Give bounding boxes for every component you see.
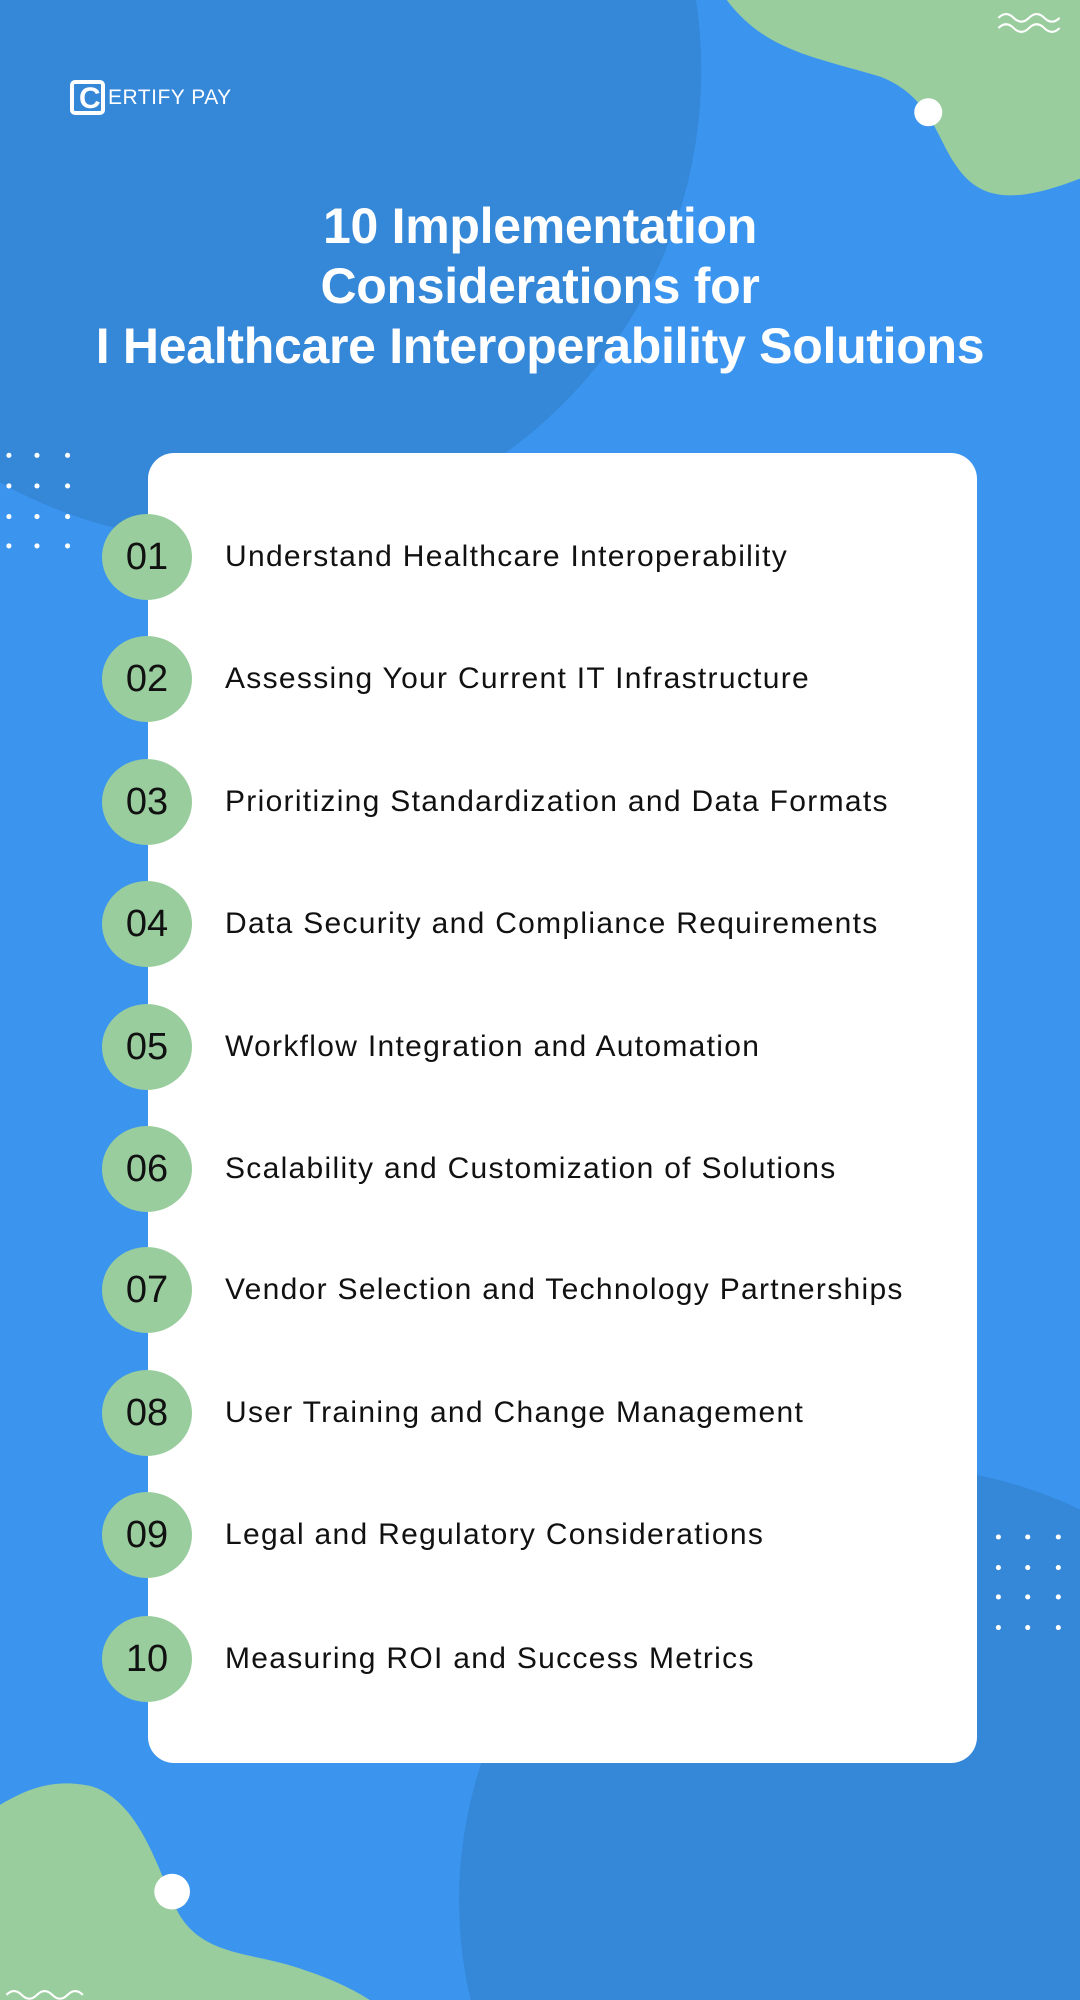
item 02: 02 xyxy=(126,658,168,700)
item 03: 03 xyxy=(126,781,168,823)
panel: list card xyxy=(148,453,977,1763)
logo: C xyxy=(79,82,101,115)
item 06: 06 xyxy=(126,1148,168,1190)
item 09 xyxy=(102,1492,764,1578)
item 08: User Training and Change Management xyxy=(225,1396,804,1429)
title: 10 Implementation xyxy=(323,198,757,254)
logo xyxy=(70,80,232,115)
item 10: Measuring ROI and Success Metrics xyxy=(225,1642,755,1675)
logo: ERTIFY PAY xyxy=(108,86,232,109)
item 05 xyxy=(102,1004,760,1090)
item 10 xyxy=(102,1616,755,1702)
item 07: 07 xyxy=(126,1269,168,1311)
item 06 xyxy=(102,1126,837,1212)
item 07 xyxy=(102,1247,904,1333)
item 02: Assessing Your Current IT Infrastructure xyxy=(225,662,810,695)
item 04: Data Security and Compliance Requirements xyxy=(225,907,879,940)
item 05: 05 xyxy=(126,1026,168,1068)
item 07: Vendor Selection and Technology Partnerships xyxy=(225,1273,904,1306)
item 01: Understand Healthcare Interoperability xyxy=(225,540,788,573)
item 08 xyxy=(102,1370,804,1456)
item 02 xyxy=(102,636,810,722)
item 03: Prioritizing Standardization and Data Formats xyxy=(225,785,889,818)
item 04 xyxy=(102,881,879,967)
item 01 xyxy=(102,514,788,600)
item 06: Scalability and Customization of Solutions xyxy=(225,1152,837,1185)
item 08: 08 xyxy=(126,1392,168,1434)
title: Considerations for xyxy=(320,258,760,314)
title xyxy=(96,198,984,374)
item 05: Workflow Integration and Automation xyxy=(225,1030,760,1063)
item 09: 09 xyxy=(126,1514,168,1556)
item 01: 01 xyxy=(126,536,168,578)
item 10: 10 xyxy=(126,1638,168,1680)
title: I Healthcare Interoperability Solutions xyxy=(96,318,984,374)
item 09: Legal and Regulatory Considerations xyxy=(225,1518,764,1551)
item 04: 04 xyxy=(126,903,168,945)
item 03 xyxy=(102,759,889,845)
